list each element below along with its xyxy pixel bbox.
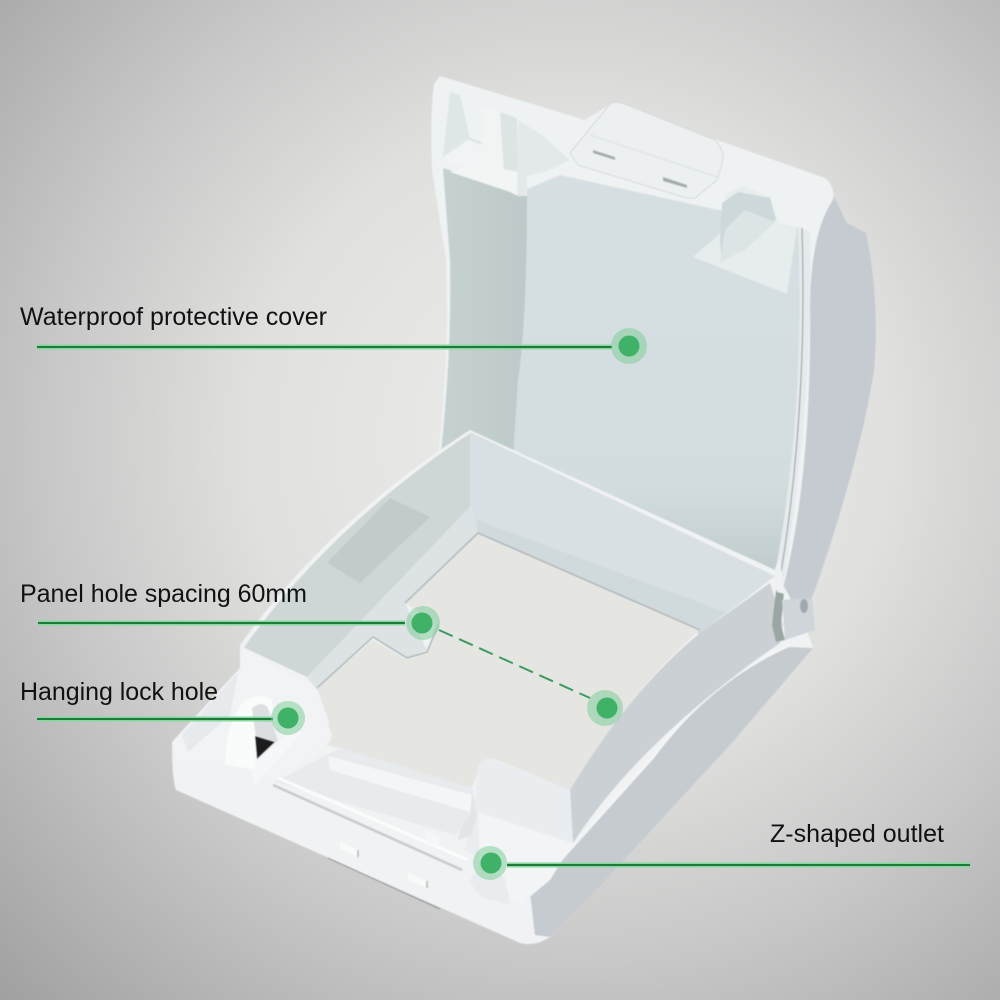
base: left wall xyxy=(243,432,470,677)
callout: panel hole spacing xyxy=(20,580,623,726)
cover: interior panel xyxy=(441,170,805,590)
outlet label text: Z-shaped outlet xyxy=(770,820,944,848)
hanging lock hole opening xyxy=(255,736,275,759)
base: outer silhouette xyxy=(172,430,813,944)
label text: Waterproof protective cover xyxy=(20,303,327,331)
base: bottom shadow line xyxy=(328,858,440,909)
base: front rim tabs xyxy=(340,841,427,888)
base: lower right compartment xyxy=(458,758,573,905)
clasp slot right xyxy=(663,177,687,188)
base: right rim highlight xyxy=(520,645,790,905)
clasp slot left xyxy=(593,150,615,160)
callout: waterproof protective cover xyxy=(20,303,647,364)
cover: clasp tab xyxy=(570,102,723,198)
base: left compartment with lock post xyxy=(172,647,332,785)
hanging lock label text: Hanging lock hole xyxy=(20,678,218,706)
callout: z-shaped outlet xyxy=(473,820,970,880)
hinge xyxy=(772,560,815,642)
cover: top left moulded blocks xyxy=(443,92,570,196)
cover: frame highlight strip xyxy=(772,226,810,592)
cover: front frame xyxy=(431,76,833,592)
base: back wall xyxy=(470,432,775,634)
panel hole label text: Panel hole spacing 60mm xyxy=(20,580,307,608)
callout: hanging lock hole xyxy=(20,678,305,735)
cover: interior left panel xyxy=(441,168,527,472)
cover: right notch bracket xyxy=(693,186,797,294)
base: right inner wall xyxy=(570,583,783,843)
base: floor opening xyxy=(317,533,700,790)
base: opening outline xyxy=(317,533,700,688)
base: back ledge xyxy=(477,520,725,634)
product: open waterproof box xyxy=(172,76,876,944)
base: front tray xyxy=(273,748,472,870)
base: left ledge xyxy=(307,507,478,690)
base: outlet recess xyxy=(470,865,510,905)
base: outer right side face xyxy=(530,647,813,937)
cover: side face xyxy=(770,180,876,625)
